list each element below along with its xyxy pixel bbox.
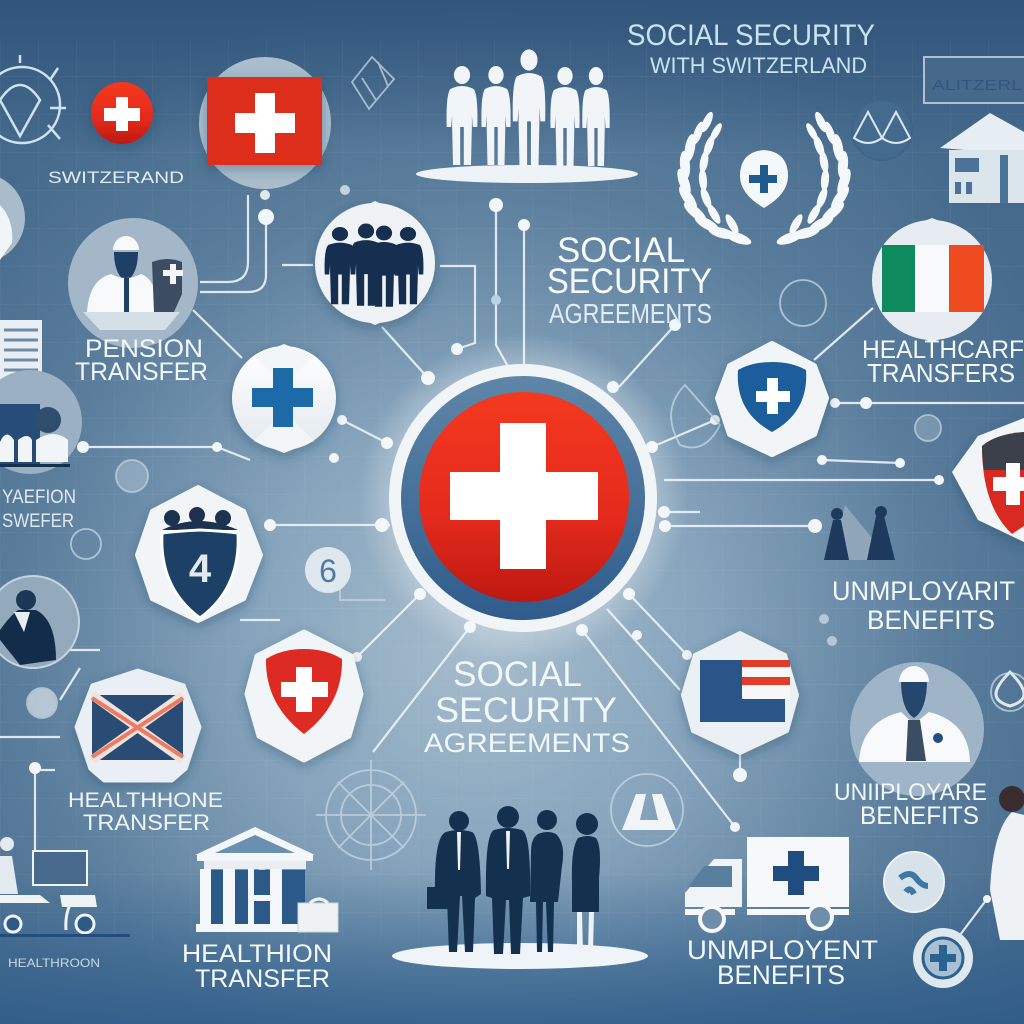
label: Healthhone Transfer: HEALTHHONE (68, 789, 223, 812)
central red cross badge (358, 333, 688, 663)
label: Switzerland: SWITZERAND (48, 168, 184, 187)
icon: compass (0, 55, 66, 143)
label: partial Pension Transfer: SWEFER (2, 511, 74, 532)
icon: document panel (924, 57, 1024, 103)
label: Healthcare Transfers: HEALTHCARF (862, 336, 1024, 364)
icon: droplet sign right (996, 672, 1024, 706)
label: Healthhone Transfer: TRANSFER (83, 810, 210, 835)
label: Unemployent Benefits: BENEFITS (717, 960, 845, 990)
icon: scales (852, 100, 912, 160)
label: Healthcare Transfers (862, 336, 1024, 388)
icon: Italian flag (872, 218, 992, 342)
label: Social Security Agreements lower: AGREEMENTS (424, 728, 630, 758)
icon: bank building (195, 827, 338, 932)
label: Healthion Transfer: TRANSFER (195, 965, 330, 993)
icon: building (940, 113, 1024, 203)
label: Unemployare Benefits right: UNIIPLOYARE (834, 779, 987, 806)
business people group (392, 806, 648, 969)
label: Pension Transfer: TRANSFER (75, 358, 208, 386)
label: Pension Transfer: PENSION (85, 335, 203, 363)
icon: left edge circle (0, 173, 25, 263)
icon: blue cross disc (232, 344, 336, 453)
label: Unemployarit Benefits upper (832, 576, 1015, 635)
connector nodes (29, 185, 991, 903)
label: Social Security Agreements upper: AGREEMENTS (549, 298, 712, 329)
label: Social Security Agreements lower (424, 655, 630, 758)
icon: documents panel (0, 320, 42, 406)
icon: small silhouettes (824, 505, 895, 560)
icon: digit disc: 6 (319, 553, 337, 589)
label: Unemployent Benefits: UNMPLOYENT (687, 935, 878, 965)
label: Pension Transfer (75, 335, 208, 386)
icon: worker circle (68, 218, 198, 348)
label: faint caption bottom left: HEALTHROON (8, 956, 100, 970)
icon: wheelchair desk (0, 837, 130, 937)
icon: scale symbol (622, 794, 676, 830)
icon: digit disc (305, 547, 351, 593)
icon: shield hexagon (718, 344, 826, 454)
label: Healthhone Transfer (68, 789, 223, 835)
icon: Swiss flag (199, 57, 331, 200)
icon: worker right (850, 662, 984, 796)
label: Social Security Agreements upper: SOCIAL (557, 231, 685, 270)
title: SOCIAL SECURITY (627, 19, 875, 52)
icon: advisor circle left (0, 576, 79, 668)
label: Unemployarit Benefits upper: BENEFITS (867, 605, 995, 635)
title: WITH SWITZERLAND (650, 53, 867, 78)
connector lines (0, 195, 1024, 935)
icon: shield badge with people (137, 487, 261, 621)
icon: shield badge with people: 4 (189, 547, 212, 591)
label: Unemployent Benefits (687, 935, 878, 990)
label: Unemployare Benefits right: BENEFITS (860, 802, 979, 830)
icon: red shield hexagon (247, 632, 361, 760)
label: Healthion Transfer (182, 940, 332, 993)
icon: staff group on platform (416, 49, 638, 183)
icon: standing doctor (990, 786, 1024, 940)
icon: document panel: ALITZERL (932, 77, 1022, 94)
label: Social Security Agreements upper (547, 231, 712, 329)
label: Healthion Transfer: HEALTHION (182, 940, 332, 968)
icon: ambulance truck (685, 837, 849, 931)
label: Social Security Agreements lower: SECURITY (435, 691, 617, 730)
label: Unemployarit Benefits upper: UNMPLOYARIT (832, 576, 1015, 606)
decorative line icons (27, 57, 1024, 870)
label: Social Security Agreements lower: SOCIAL (453, 655, 582, 694)
label: partial Pension Transfer: YAEFION (2, 487, 76, 508)
icon: shield partial right (952, 418, 1024, 542)
label: Unemployare Benefits right (834, 779, 987, 830)
title (627, 19, 875, 78)
icon: tool disc (884, 852, 944, 912)
label: partial Pension Transfer (2, 487, 76, 532)
icon: team hexagon (315, 201, 435, 325)
icon: small red cross (91, 82, 153, 144)
icon: US flag hexagon (683, 633, 797, 753)
label: Healthcare Transfers: TRANSFERS (867, 358, 1015, 388)
icon: UK flag hexagon (76, 670, 200, 781)
icon: plus disc bottom (913, 928, 973, 988)
icon: group circle left (0, 370, 82, 474)
icon: laurel wreath with cross (675, 110, 853, 247)
label: Social Security Agreements upper: SECURITY (547, 262, 712, 301)
